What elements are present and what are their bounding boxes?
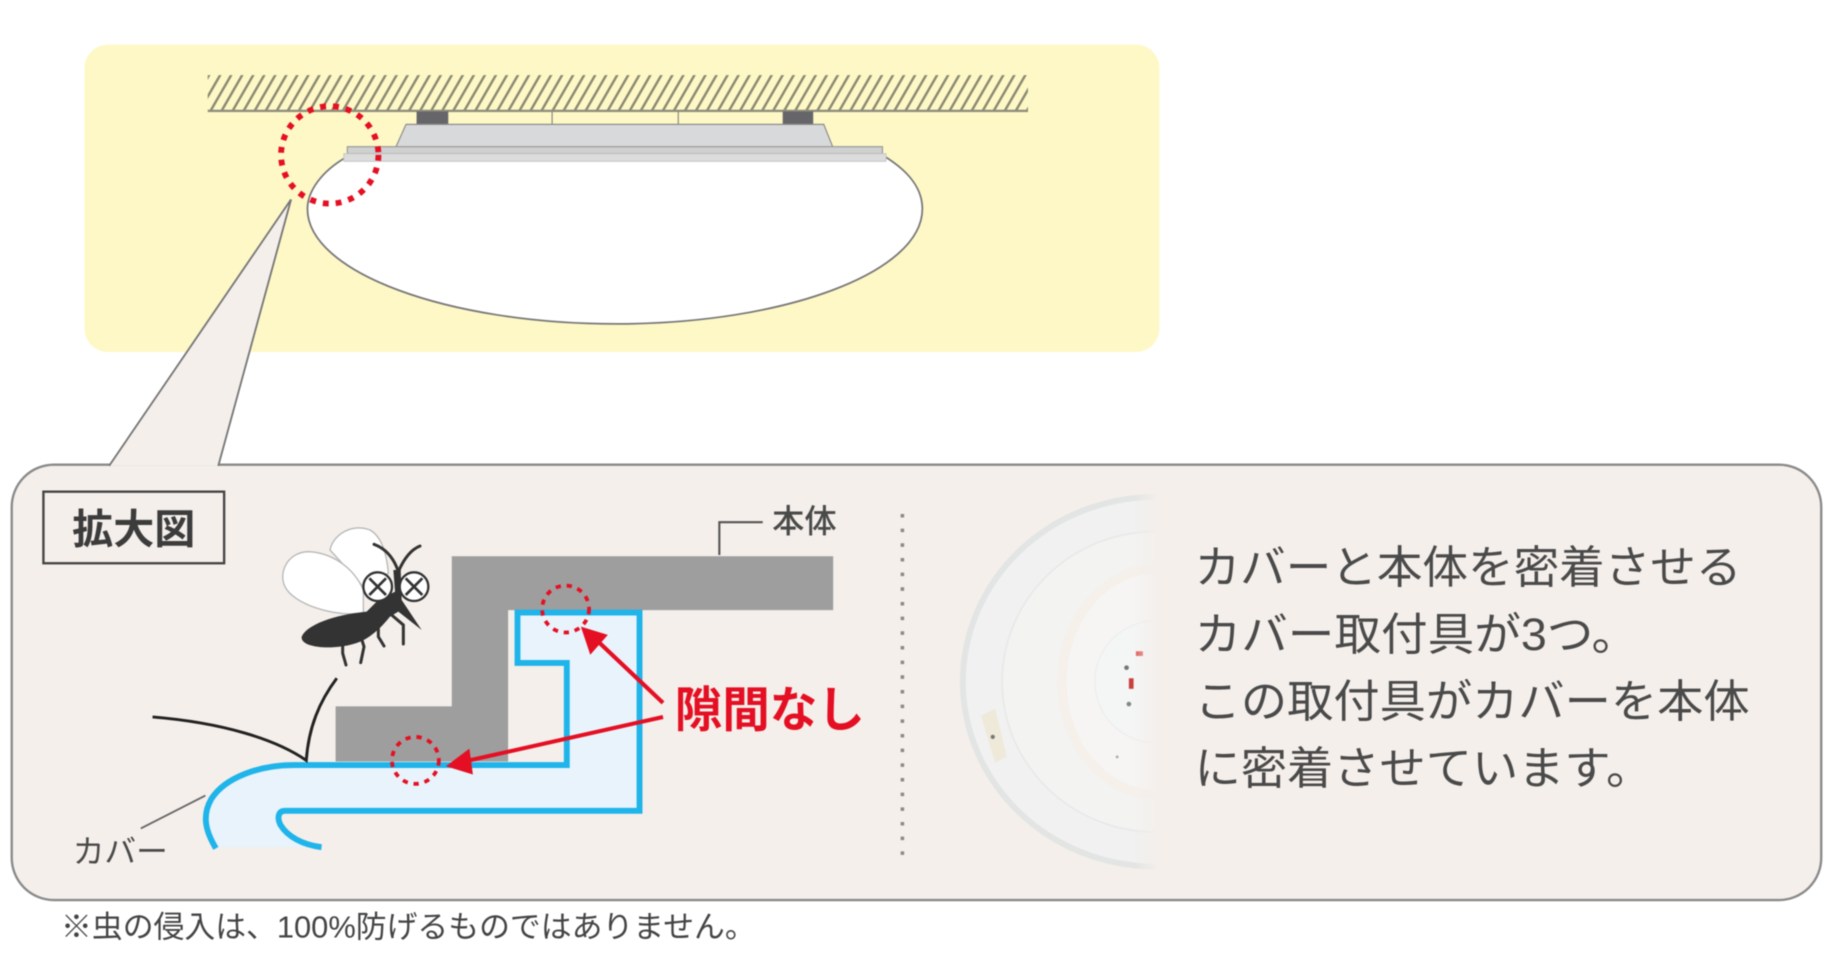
description text: この取付具がカバーを本体 (1195, 676, 1750, 727)
description text (1195, 542, 1750, 794)
description text: カバー取付具が3つ。 (1195, 609, 1638, 660)
heading: 拡大図: 拡大図 (72, 506, 195, 552)
dotted divider (901, 514, 904, 860)
red dotted circle: lower contact (392, 737, 439, 784)
red dotted circle: upper contact (542, 586, 589, 632)
description text: に密着させています。 (1195, 743, 1652, 794)
description text: カバーと本体を密着させる (1195, 542, 1741, 593)
label: 本体 (719, 504, 837, 555)
main body cross-section (336, 556, 833, 762)
arrow: to upper contact (581, 627, 663, 703)
panel: yellow ceiling light side view (84, 45, 1159, 352)
arrow: to lower contact (446, 717, 663, 774)
heading: 拡大図 (43, 492, 224, 563)
insect cover lines (153, 678, 337, 760)
ceiling light fixture (307, 111, 922, 324)
cover cross-section (206, 613, 640, 848)
label: 本体: 本体 (772, 504, 837, 540)
icon: mosquito (283, 528, 428, 665)
callout pointer (109, 199, 291, 466)
photo: lamp underside (960, 495, 1148, 868)
footnote: ※虫の侵入は、100%防げるものではありません。 (61, 911, 756, 945)
label: カバー: カバー (73, 833, 168, 869)
ceiling hatching (208, 75, 1028, 112)
panel: enlarged view (12, 199, 1821, 900)
callout text: 隙間なし: 隙間なし (675, 683, 865, 737)
red dotted magnifier circle (281, 106, 378, 204)
label: カバー (73, 796, 205, 869)
